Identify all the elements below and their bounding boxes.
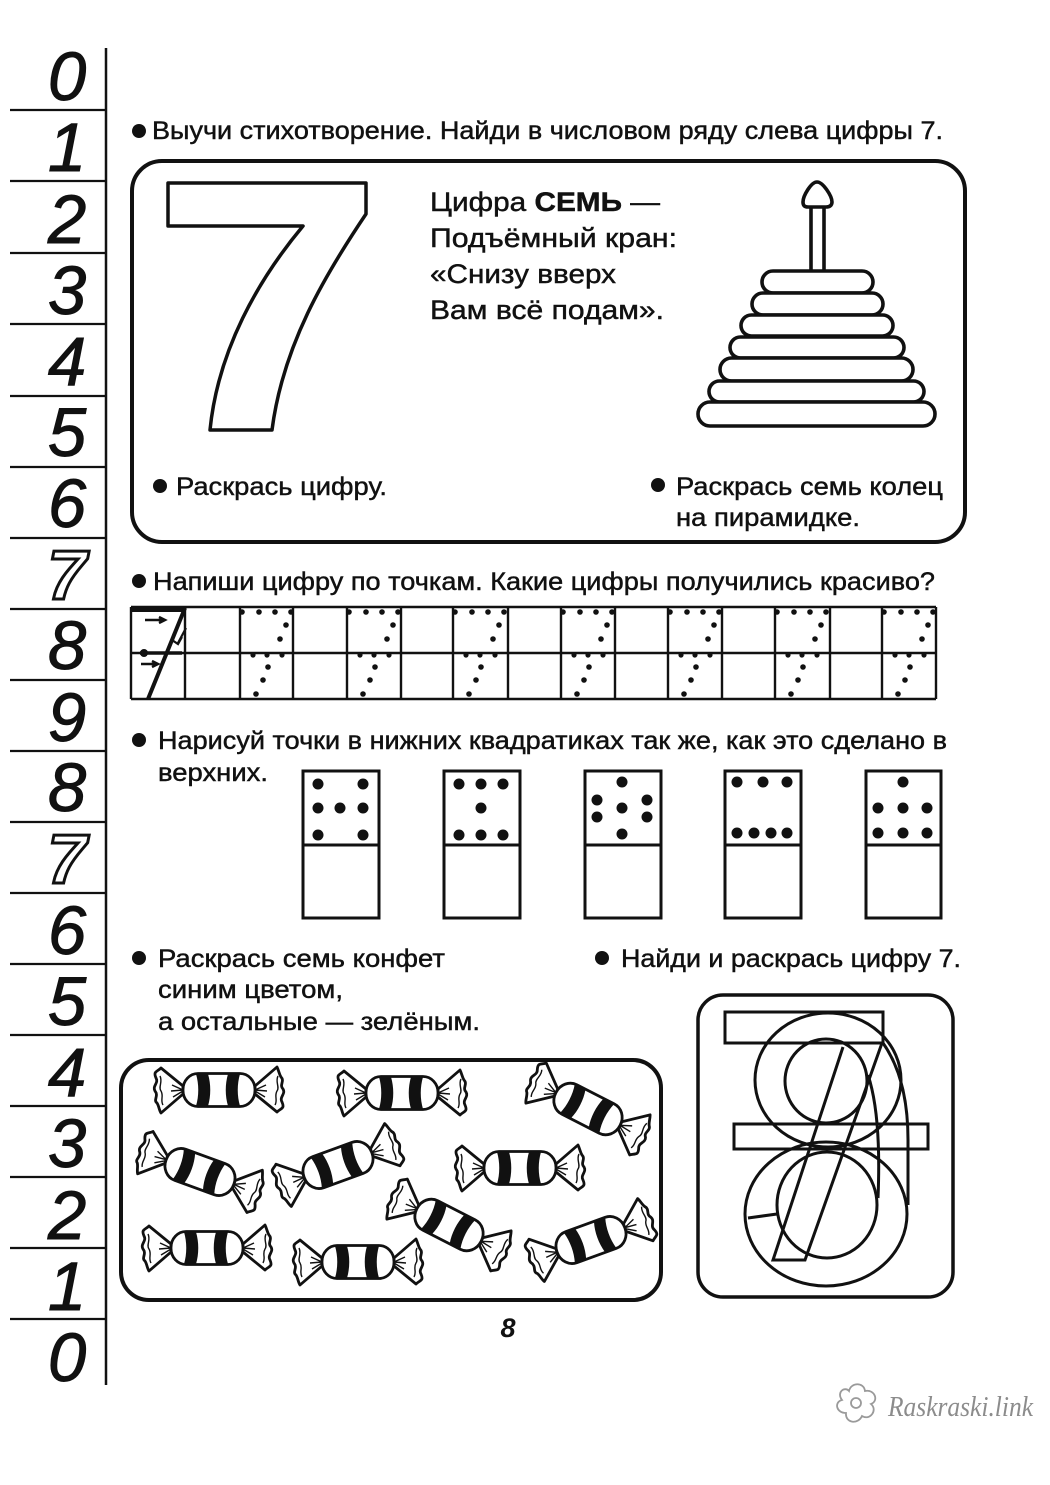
- panel: candies: [121, 1059, 661, 1300]
- number ruler: 3: [48, 1105, 86, 1182]
- domino 3: [585, 771, 661, 918]
- domino 4: [725, 771, 801, 918]
- instruction: colour candies: [132, 945, 480, 1036]
- number ruler: 2: [47, 1177, 86, 1254]
- panel: hidden digits: [698, 995, 953, 1297]
- number ruler: [10, 38, 106, 1396]
- poem: Подъёмный кран:: [430, 223, 677, 253]
- number ruler: 8: [48, 749, 86, 826]
- sample digit with arrows: [131, 606, 186, 699]
- instruction: draw dots: верхних.: [158, 759, 268, 787]
- watermark: [837, 1384, 1034, 1423]
- poem: Цифра СЕМЬ —: [430, 187, 660, 217]
- instruction: colour candies: Раскрась семь конфет: [158, 945, 446, 973]
- number ruler: 9: [48, 679, 86, 756]
- page number: 8: [500, 1313, 516, 1343]
- caption: colour seven rings: [651, 473, 943, 532]
- poem: Вам всё подам».: [430, 295, 664, 325]
- instruction: colour candies: синим цветом,: [158, 976, 343, 1004]
- number ruler: 4: [48, 323, 86, 400]
- instruction: trace the digit: Напиши цифру по точкам. Какие цифры получились красиво?: [153, 568, 935, 596]
- instruction: colour candies: а остальные — зелёным.: [158, 1008, 480, 1036]
- dominoes: [303, 771, 941, 918]
- domino 1: [303, 771, 379, 918]
- caption: colour seven rings: на пирамидке.: [676, 504, 860, 532]
- number ruler: 7: [48, 536, 90, 614]
- tracing grid: [131, 606, 936, 699]
- number ruler: 6: [48, 892, 87, 969]
- number ruler: 5: [48, 963, 87, 1040]
- number ruler: 1: [48, 109, 86, 186]
- caption: colour the digit: Раскрась цифру.: [176, 473, 387, 501]
- caption: colour seven rings: Раскрась семь колец: [676, 473, 943, 501]
- number ruler: 8: [48, 607, 86, 684]
- number ruler: 7: [48, 820, 90, 898]
- number ruler: 0: [48, 38, 86, 115]
- number ruler: 4: [48, 1034, 86, 1111]
- big outlined digit 7: [168, 183, 366, 430]
- dotted digits: [239, 609, 936, 697]
- number ruler: 6: [48, 465, 87, 542]
- number ruler: 5: [48, 394, 87, 471]
- number ruler: 3: [48, 252, 86, 329]
- poem: «Снизу вверх: [430, 259, 617, 289]
- poem: [430, 187, 677, 325]
- instruction: draw dots: Нарисуй точки в нижних квадратиках так же, как это сделано в: [158, 727, 947, 755]
- domino 2: [444, 771, 520, 918]
- number ruler: 2: [47, 181, 86, 258]
- icon: ring pyramid: [698, 182, 935, 426]
- icon: flower: [837, 1384, 875, 1422]
- number ruler: 0: [48, 1319, 86, 1396]
- instruction: draw dots: [132, 727, 947, 787]
- watermark: Raskraski.link: [887, 1392, 1034, 1423]
- domino 5: [866, 771, 941, 918]
- instruction: find the digit: Найди и раскрась цифру 7.: [621, 945, 961, 973]
- instruction: learn the poem: Выучи стихотворение. Найди в числовом ряду слева цифры 7.: [152, 117, 943, 145]
- panel: digit seven: [132, 161, 965, 542]
- number ruler: 1: [48, 1248, 86, 1325]
